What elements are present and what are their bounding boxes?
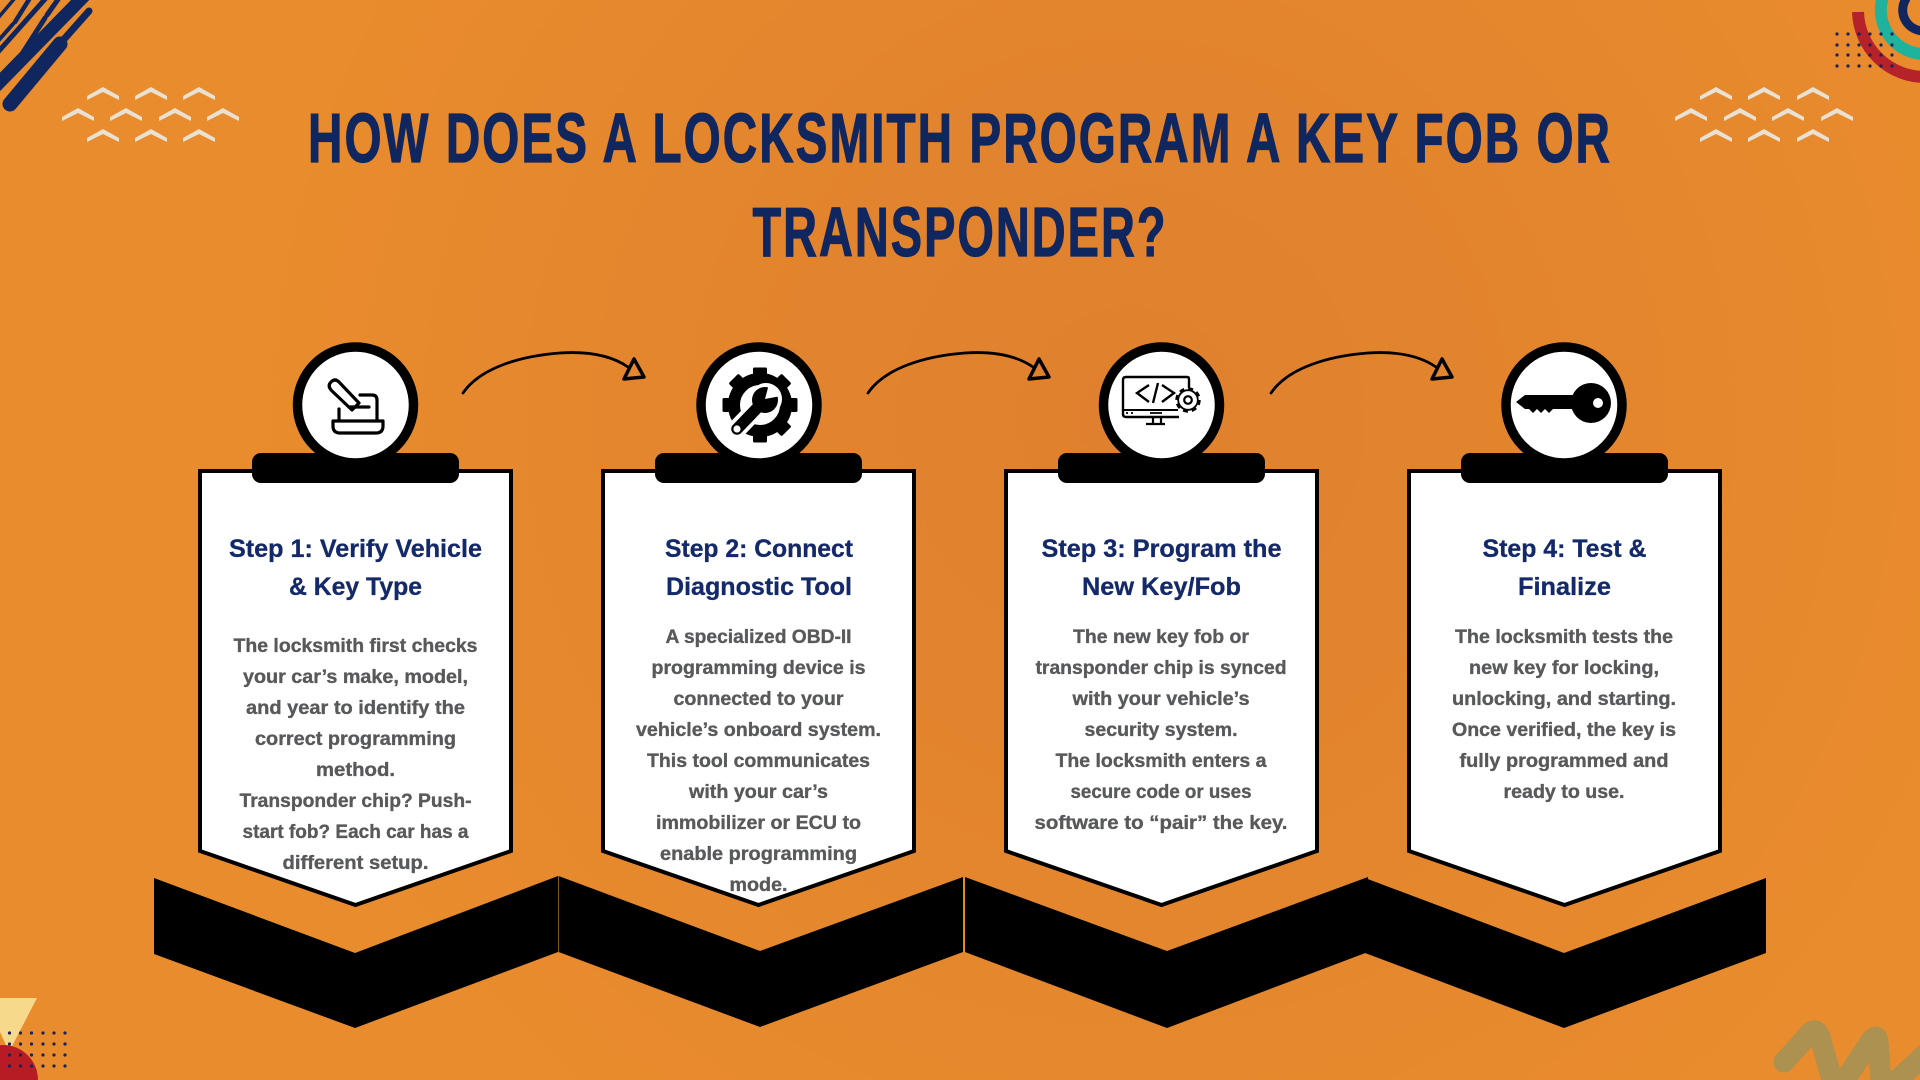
decoration: chevron pattern right — [1675, 87, 1853, 142]
card shape — [603, 471, 914, 905]
heading: Step 3: Program the — [1042, 535, 1282, 563]
body text: secure code or uses — [1070, 782, 1252, 803]
heading: Step 1: Verify Vehicle — [229, 535, 482, 563]
icon circle — [1104, 347, 1220, 463]
body text: enable programming — [660, 844, 857, 865]
body text: and year to identify the — [246, 698, 465, 719]
panel: step 1 — [200, 347, 511, 905]
body text: The locksmith enters a — [1056, 751, 1267, 772]
decoration: concentric arcs and dots top-right — [1835, 0, 1920, 77]
body text: unlocking, and starting. — [1452, 689, 1676, 710]
icon: gear and wrench — [722, 368, 798, 442]
icon: key — [1516, 383, 1611, 423]
decoration: olive squiggle bottom-right — [1784, 1031, 1920, 1080]
body text: your car’s make, model, — [243, 667, 468, 688]
arrow: step 2 to step 3 — [868, 353, 1049, 393]
decoration: chevron pattern left — [62, 87, 239, 142]
body text: mode. — [730, 875, 788, 896]
clip bar — [252, 453, 459, 483]
clip bar — [655, 453, 862, 483]
heading — [1042, 535, 1282, 601]
body text: A specialized OBD-II — [666, 627, 852, 648]
heading — [1482, 535, 1646, 601]
body text: The new key fob or — [1073, 627, 1250, 648]
body text: different setup. — [282, 853, 428, 874]
body text: vehicle’s onboard system. — [636, 720, 881, 741]
body text: ready to use. — [1504, 782, 1624, 803]
body text: This tool communicates — [647, 751, 870, 772]
clip bar — [1058, 453, 1265, 483]
body text: method. — [316, 760, 395, 781]
heading: Step 2: Connect — [665, 535, 854, 563]
heading: & Key Type — [289, 573, 422, 601]
body text: The locksmith first checks — [234, 636, 478, 657]
body text — [1452, 627, 1676, 803]
heading: New Key/Fob — [1082, 573, 1241, 601]
body text — [234, 636, 478, 874]
heading: Diagnostic Tool — [666, 573, 852, 601]
body text: programming device is — [652, 658, 866, 679]
body text: software to “pair” the key. — [1034, 813, 1288, 834]
body text: security system. — [1084, 720, 1238, 741]
body text — [636, 627, 881, 896]
clip bar — [1461, 453, 1668, 483]
body text: new key for locking, — [1469, 658, 1659, 679]
card shape — [1006, 471, 1317, 905]
icon: monitor with code and gear — [1123, 377, 1200, 424]
body text: immobilizer or ECU to — [656, 813, 861, 834]
heading — [229, 535, 482, 601]
body text: fully programmed and — [1460, 751, 1668, 772]
body text: with your car’s — [688, 782, 828, 803]
body text: transponder chip is synced — [1036, 658, 1286, 679]
panel: step 4 — [1409, 347, 1720, 905]
card shape — [200, 471, 511, 905]
icon circle — [701, 347, 817, 463]
arrow: step 1 to step 2 — [463, 353, 644, 393]
body text: Once verified, the key is — [1452, 720, 1676, 741]
panel: step 3 — [1006, 347, 1317, 905]
icon circle — [1506, 347, 1622, 463]
body text: Transponder chip? Push- — [240, 791, 472, 812]
card shape — [1409, 471, 1720, 905]
heading: Step 4: Test & — [1482, 535, 1646, 563]
body text: The locksmith tests the — [1455, 627, 1673, 648]
icon: lever — [329, 380, 383, 433]
panel: step 2 — [603, 347, 914, 905]
title: TRANSPONDER? — [752, 193, 1168, 271]
body text: correct programming — [255, 729, 456, 750]
decoration: triangle, circle and dots bottom-left — [0, 998, 67, 1080]
body text: start fob? Each car has a — [242, 822, 469, 843]
title — [308, 99, 1612, 271]
heading — [665, 535, 854, 601]
black zigzag band — [154, 876, 1766, 1028]
heading: Finalize — [1518, 573, 1611, 601]
decoration: navy brush strokes top-left — [0, 0, 89, 104]
arrow: step 3 to step 4 — [1271, 353, 1452, 393]
icon circle — [298, 347, 414, 463]
body text — [1034, 627, 1288, 834]
body text: connected to your — [674, 689, 844, 710]
body text: with your vehicle’s — [1071, 689, 1250, 710]
